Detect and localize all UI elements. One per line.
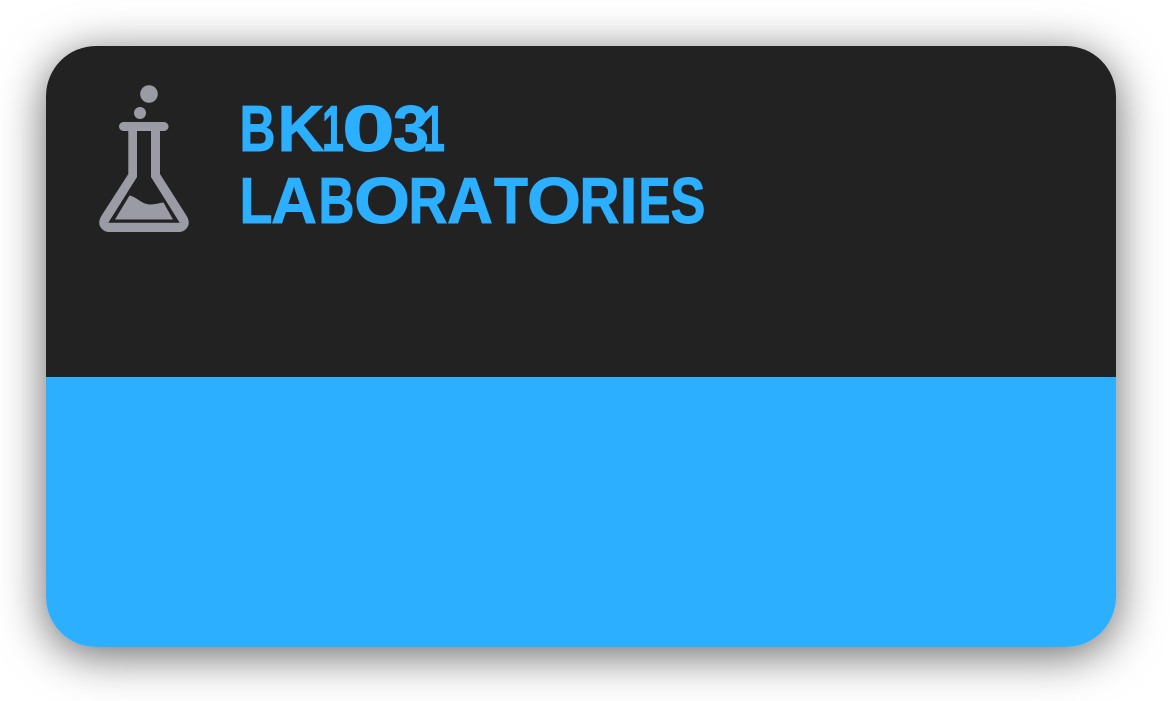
- title: 1: [322, 92, 344, 165]
- title: A: [447, 164, 493, 237]
- panel: business card: [46, 46, 1116, 647]
- panel: dark upper section: [46, 46, 1116, 377]
- title: E: [638, 164, 670, 237]
- title: K: [278, 92, 325, 165]
- title: L: [240, 164, 272, 237]
- title: R: [408, 164, 448, 237]
- title: S: [670, 164, 706, 237]
- icon: flask: [99, 85, 189, 232]
- title: B: [318, 164, 354, 237]
- title: 3: [393, 92, 429, 165]
- title: [240, 92, 706, 237]
- title: A: [271, 164, 317, 237]
- title: R: [580, 164, 620, 237]
- title: T: [494, 164, 528, 237]
- title: O: [527, 164, 581, 237]
- title: I: [620, 164, 638, 237]
- title: 1: [423, 92, 445, 165]
- title: B: [240, 92, 276, 165]
- title: O: [354, 164, 410, 237]
- panel: blue lower section: [46, 377, 1116, 647]
- title: 0: [342, 92, 395, 165]
